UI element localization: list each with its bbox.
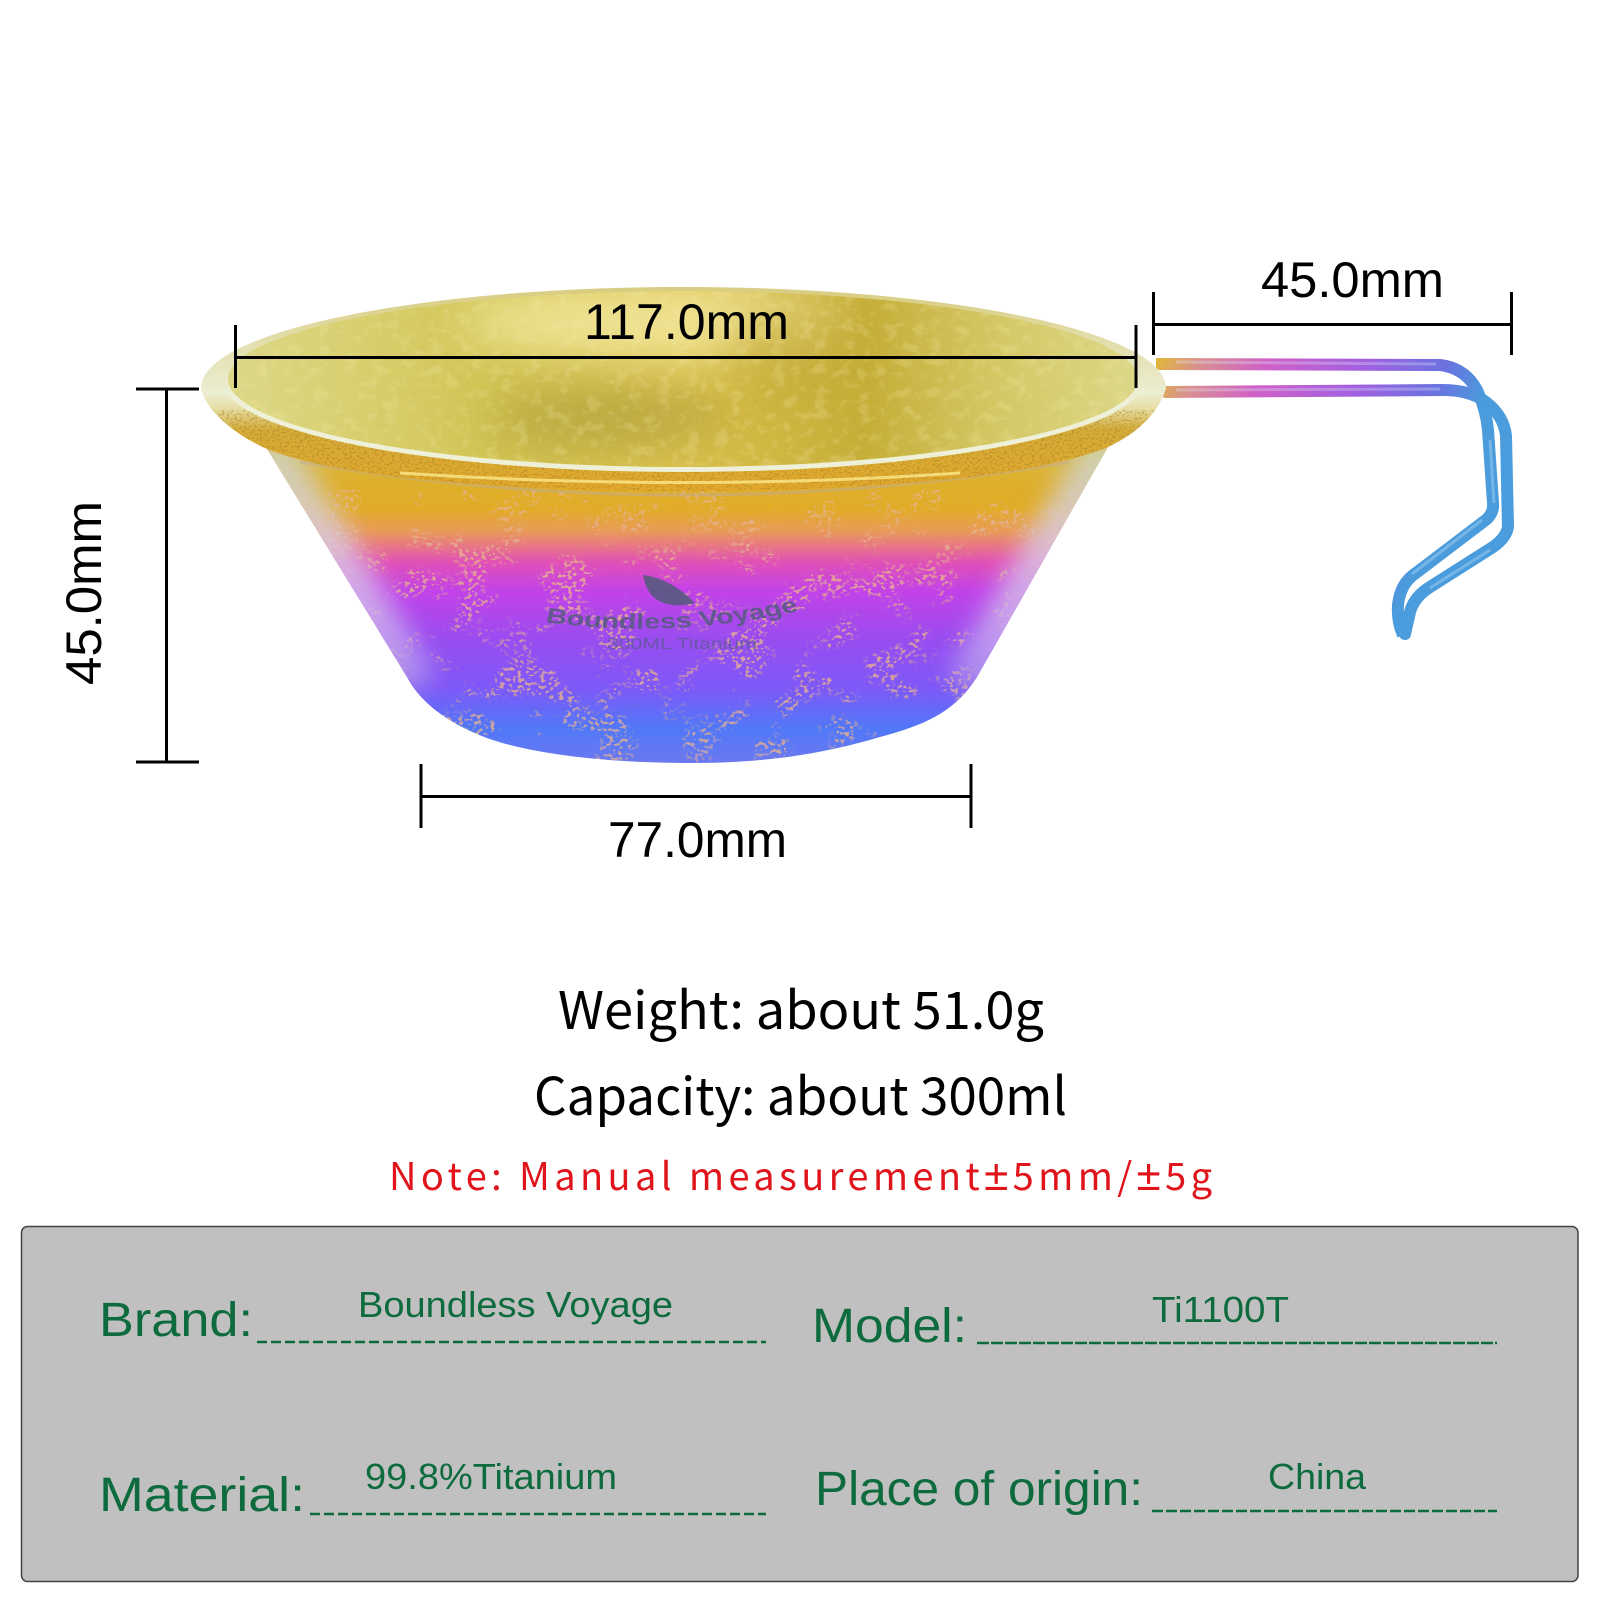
material row (99, 1456, 766, 1522)
cup interior (228, 291, 1138, 467)
model row (812, 1289, 1497, 1353)
interior mottling (264, 291, 1110, 467)
dimension: height 45.0mm: 45.0mm (56, 501, 112, 685)
feather icon (643, 575, 695, 605)
measurement note: Note: Manual measurement±5mm/±5g (389, 1146, 1212, 1201)
dimension: handle length 45.0mm (1154, 252, 1512, 355)
brand row: Brand: (99, 1294, 253, 1347)
wire highlights (1176, 362, 1494, 588)
brand engraving: Boundless Voyage (547, 602, 797, 629)
dimension: base diameter 77.0mm (421, 764, 971, 868)
brand row (99, 1284, 766, 1347)
dimension: rim diameter 117.0mm: 117.0mm (584, 294, 789, 350)
weight text: Weight: about 51.0g (558, 969, 1044, 1044)
engraved logo (547, 575, 797, 653)
cup handle wires (1156, 362, 1508, 635)
front wire (1166, 390, 1508, 634)
specification panel (22, 1226, 1578, 1582)
place of origin row: China (1268, 1456, 1367, 1497)
cup body (267, 447, 1108, 763)
model row: Model: (812, 1300, 967, 1353)
rim pale inner lip (223, 290, 1143, 472)
place of origin row (815, 1456, 1497, 1516)
brand row: Boundless Voyage (358, 1284, 673, 1325)
capacity text: Capacity: about 300ml (534, 1055, 1067, 1130)
capacity engraving: 300ML Titanium (607, 636, 757, 653)
place of origin row: Place of origin: (815, 1463, 1143, 1516)
panel background (22, 1226, 1578, 1582)
material row: 99.8%Titanium (365, 1456, 617, 1497)
brand engraving (547, 602, 797, 629)
dimension: base diameter 77.0mm: 77.0mm (608, 812, 787, 868)
model row: Ti1100T (1152, 1289, 1289, 1330)
dimension: handle length 45.0mm: 45.0mm (1261, 252, 1444, 308)
cup photo (201, 287, 1514, 763)
dimension: height 45.0mm (56, 389, 199, 762)
material row: Material: (99, 1469, 305, 1522)
dimension: rim diameter 117.0mm (236, 294, 1136, 388)
speckled finish and pale sides on body (260, 445, 1120, 765)
rim gold texture (200, 410, 1170, 494)
cup rim (201, 287, 1166, 491)
rear wire (1156, 364, 1493, 635)
